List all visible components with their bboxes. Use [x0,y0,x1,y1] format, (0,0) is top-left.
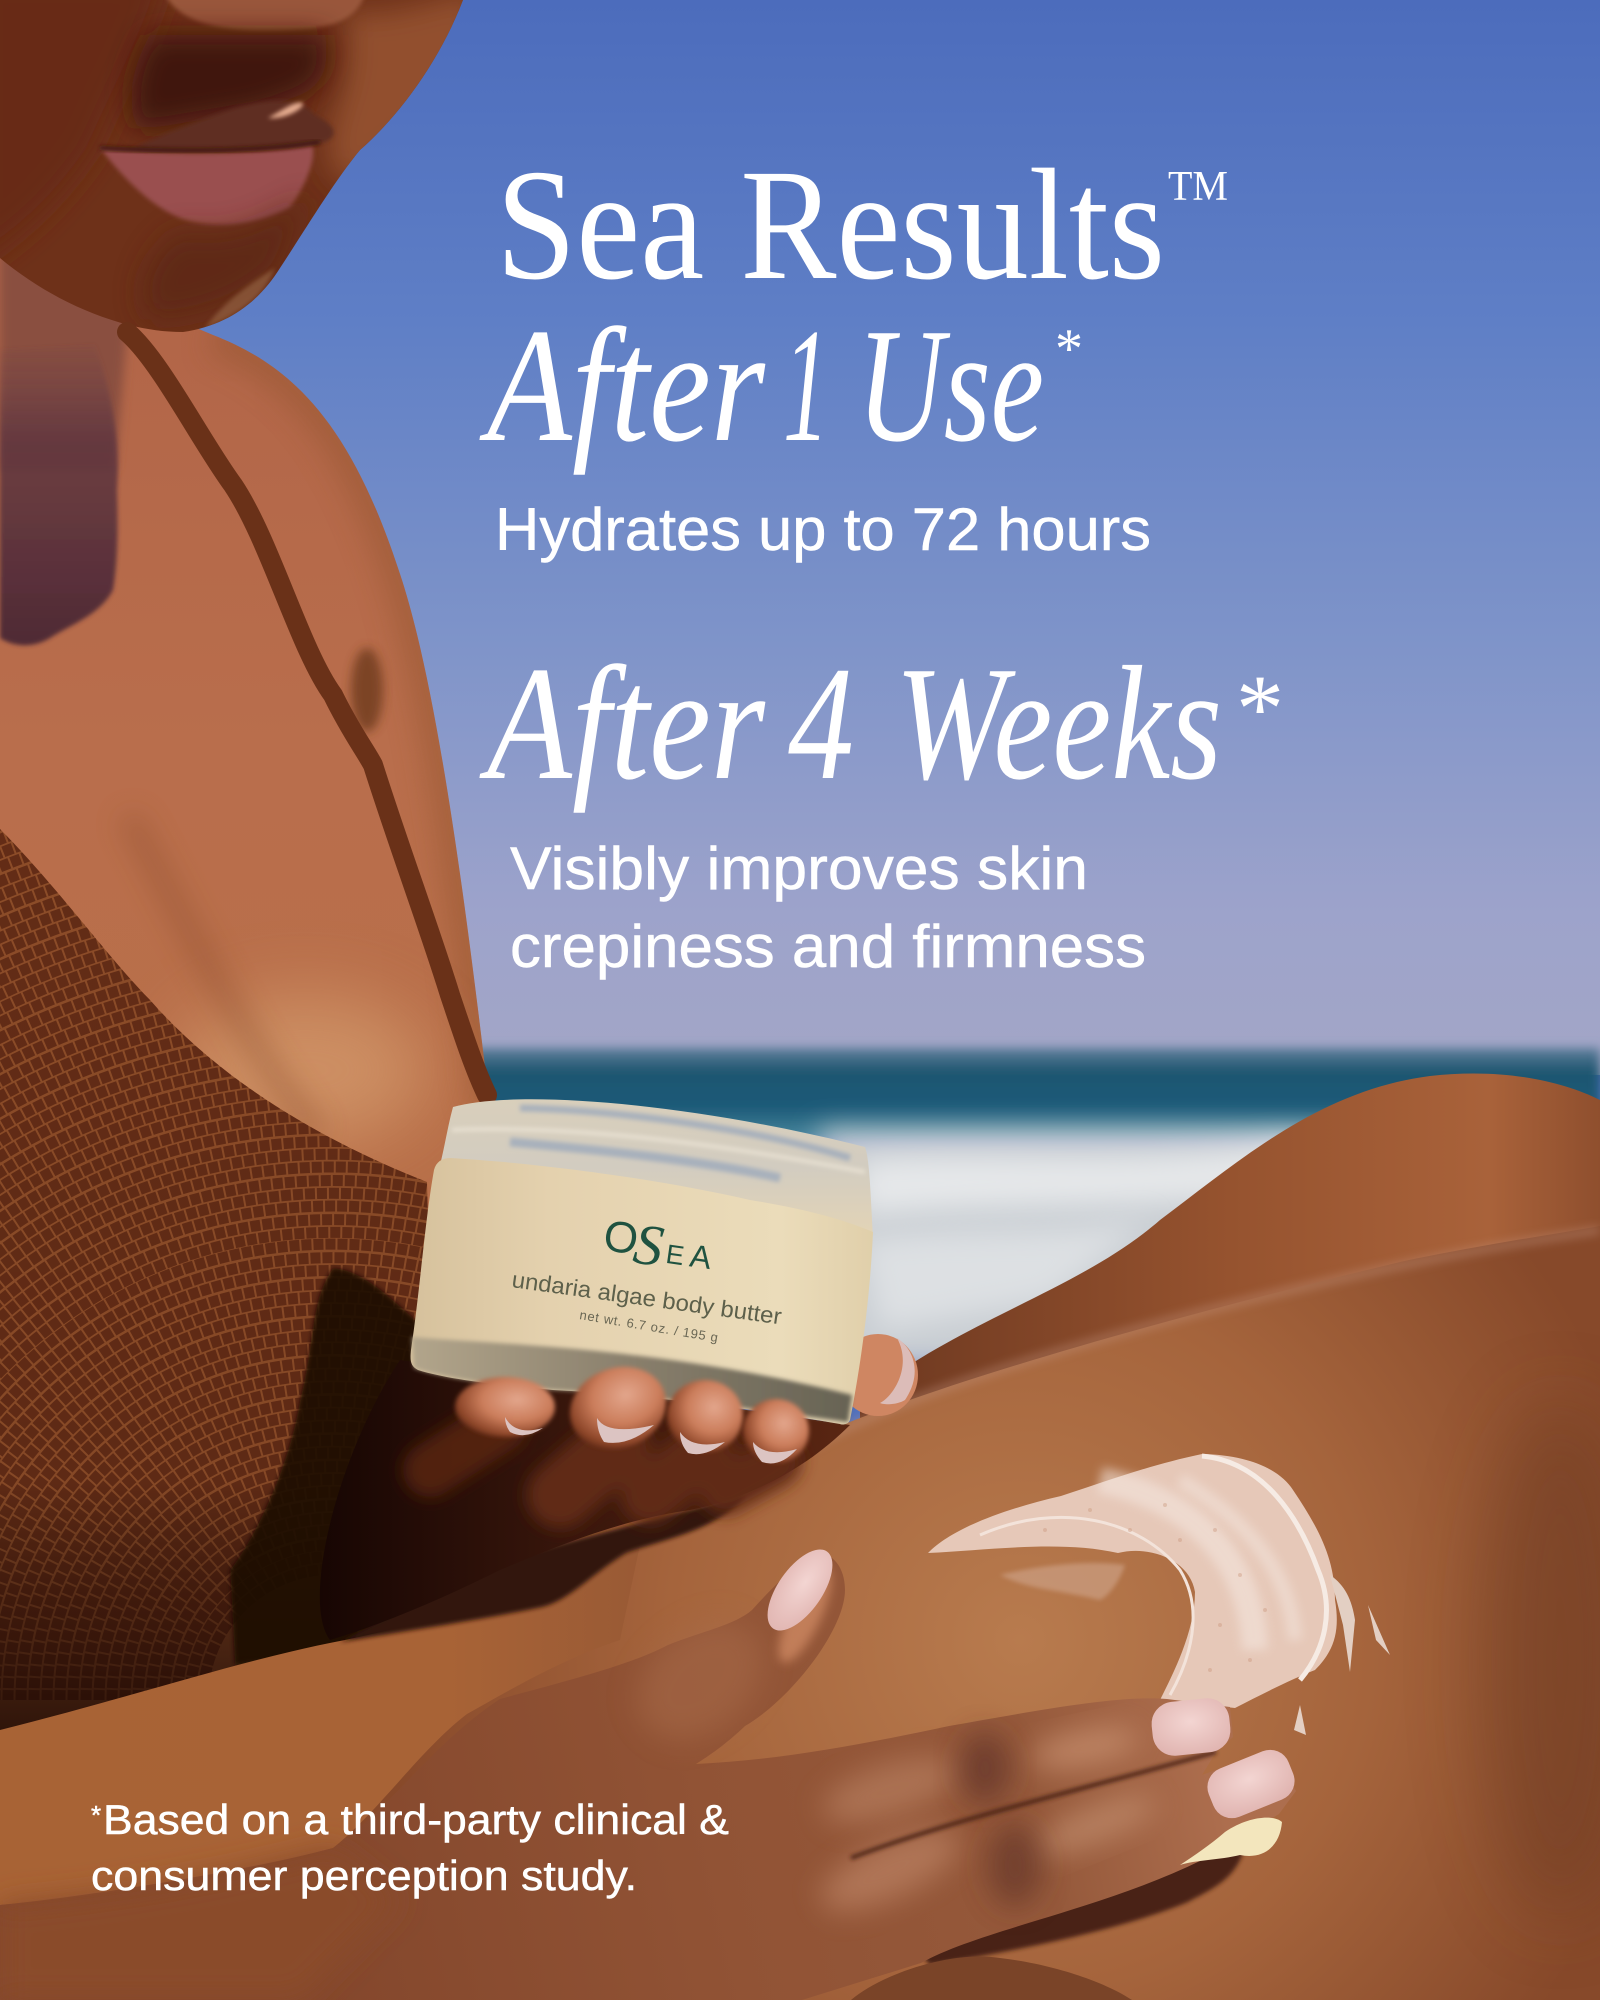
jar logo: S [630,1211,668,1279]
footnote: consumer perception study. [91,1852,637,1899]
holding hand fingertips [455,1354,809,1463]
heading: After 1 Use: Use [857,296,1044,476]
torso and shoulder [0,258,485,1212]
heading: After 1 Use: After [479,296,765,476]
forearm [0,1545,640,1905]
face and lips [0,0,480,340]
little finger at bottom edge [851,1956,1132,2000]
trademark symbol: TM [1168,164,1228,210]
headline: Sea Results: Sea Results [496,137,1165,313]
text: visibly improves: crepiness and firmness [510,913,1146,980]
hand shadow on swimsuit [230,1268,440,1665]
jar product name: undaria algae body butter [510,1266,784,1329]
index fingernail [1149,1696,1233,1758]
thigh rim highlight [760,1230,1600,1475]
asterisk after 4 weeks: * [1236,655,1284,762]
open jar [411,1099,873,1425]
text: visibly improves: Visibly improves skin [510,835,1088,902]
jar logo: O [601,1211,641,1265]
swimsuit strap [127,332,487,1095]
text: visibly improves [510,835,1146,980]
cream under fingertips [1180,1818,1282,1865]
jar neck reflections [452,1108,865,1178]
text: hydrates: Hydrates up to 72 hours [495,496,1151,563]
sky background [0,0,1600,1075]
heading: After 4 Weeks: Weeks [895,634,1222,814]
lower hand with thumb and fingers [0,1553,1296,2000]
heading: After 4 Weeks: 4 [788,634,854,814]
footnote: Based on a third-party clinical & [103,1796,729,1843]
middle fingernail [1201,1744,1301,1824]
shadow under holding hand [340,1495,745,1642]
jar base band [412,1337,852,1422]
holding hand thumb [838,1334,918,1416]
shadow under rubbing fingers [900,1850,1244,1965]
swimsuit with crepe texture [0,829,428,1730]
cream flecks [1294,1575,1390,1735]
jar neck [440,1099,873,1235]
jar body [411,1158,873,1425]
holding hand finger bodies [430,1425,776,1495]
jar net weight: net wt. 6.7 oz. / 195 g [579,1307,719,1345]
holding hand palm [320,1360,850,1640]
cream swipe on thigh [928,1454,1337,1708]
front thigh [0,1226,1600,2000]
sea and surf [460,1048,1600,1370]
heading: After 4 Weeks [479,634,1222,814]
jar logo: A [688,1237,714,1276]
back leg [860,1073,1600,1470]
asterisk after 1 use: * [1055,318,1083,380]
jar logo: E [664,1239,686,1271]
thumbnail [755,1539,845,1641]
footnote [91,1796,729,1899]
heading: After 1 Use: 1 [783,296,829,476]
footnote: * [91,1800,101,1830]
heading: After 4 Weeks: After [479,634,765,814]
heading: After 1 Use [479,296,1044,476]
neck shadow [0,345,118,645]
thigh edge shading [1480,1400,1600,1920]
